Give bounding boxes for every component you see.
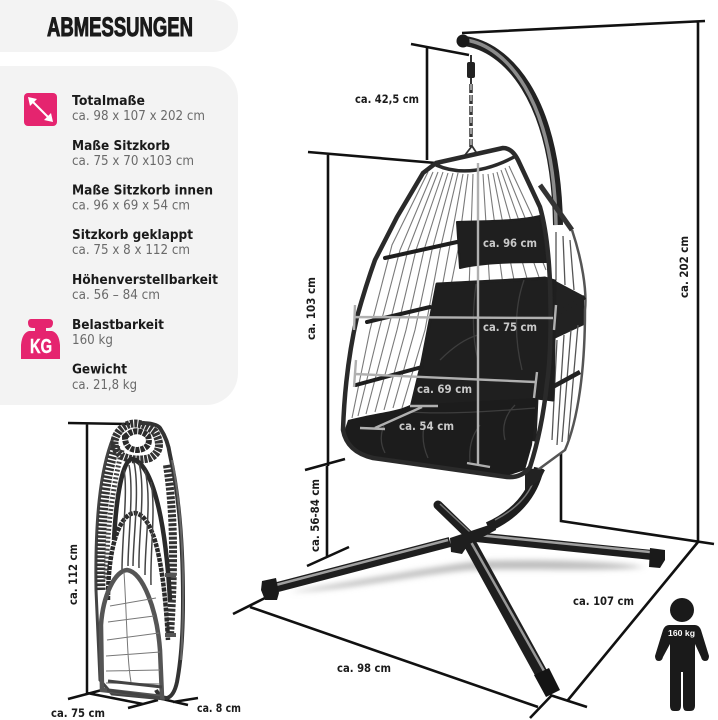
- panel: specifications: [0, 66, 238, 405]
- bottom bracket: [525, 468, 545, 490]
- spec: Gewicht: Gewicht: [72, 362, 127, 378]
- label: 98 cm: ca. 98 cm: [337, 661, 391, 675]
- spec: Sitzkorb geklappt: Sitzkorb geklappt: [72, 228, 193, 243]
- spec: Maße Sitzkorb: Maße Sitzkorb: [72, 139, 170, 154]
- spec: Totalmaße: [72, 94, 205, 124]
- post cap: [456, 34, 470, 48]
- spec: Höhenverstellbarkeit: [72, 273, 218, 303]
- label: 54 cm: ca. 54 cm: [399, 419, 454, 433]
- cushion seams: [381, 280, 535, 462]
- spec: Sitzkorb geklappt: ca. 75 x 8 x 112 cm: [72, 243, 190, 258]
- basket frame: [343, 148, 551, 477]
- seat cushion: [344, 280, 537, 476]
- label: 75 cm: ca. 75 cm: [483, 320, 537, 334]
- spec: Belastbarkeit: Belastbarkeit: [72, 318, 164, 333]
- spec: Maße Sitzkorb: ca. 75 x 70 x103 cm: [72, 154, 194, 169]
- title panel: [0, 0, 238, 52]
- spec: Gewicht: [72, 362, 137, 393]
- stand shadow: [290, 560, 645, 592]
- title: ABMESSUNGEN: [47, 12, 193, 42]
- rear basket side: [525, 185, 585, 490]
- basket spokes: [352, 166, 548, 418]
- back leg: [438, 504, 470, 536]
- spec: Höhenverstellbarkeit: Höhenverstellbarkeit: [72, 273, 218, 288]
- front leg: [468, 540, 560, 697]
- folded depth label: ca. 8 cm: [197, 701, 241, 715]
- spec: Maße Sitzkorb innen: [72, 184, 213, 214]
- post lower: [488, 468, 539, 527]
- chair stand: [261, 34, 665, 697]
- spec: Gewicht: ca. 21,8 kg: [72, 378, 137, 393]
- hub: [450, 523, 496, 554]
- post upper: [464, 41, 558, 225]
- spec: Totalmaße: ca. 98 x 107 x 202 cm: [72, 109, 205, 124]
- icon: weight KG: KG: [30, 336, 52, 358]
- interior measurement lines: [354, 163, 556, 467]
- label: 202 cm: ca. 202 cm: [677, 236, 691, 298]
- spec: Maße Sitzkorb innen: ca. 96 x 69 x 54 cm: [72, 198, 190, 214]
- icon: dimensions arrow: [24, 93, 57, 126]
- label: 107 cm: ca. 107 cm: [573, 594, 634, 608]
- label: 96 cm: ca. 96 cm: [483, 236, 537, 250]
- horizontal basket rails: [356, 242, 457, 385]
- folded basket dimension lines: [68, 423, 198, 708]
- label: 69 cm: ca. 69 cm: [417, 382, 472, 396]
- back cushion: [410, 278, 555, 440]
- spec: Belastbarkeit: 160 kg: [72, 333, 113, 348]
- headrest: [457, 216, 547, 268]
- icon: person 160 kg: [655, 598, 709, 711]
- right leg: [476, 535, 665, 568]
- spec: Maße Sitzkorb: [72, 139, 194, 169]
- label: 42,5 cm: ca. 42,5 cm: [355, 92, 419, 106]
- spec: Höhenverstellbarkeit: ca. 56 – 84 cm: [72, 288, 160, 303]
- spec: Totalmaße: Totalmaße: [72, 94, 145, 109]
- left leg: [261, 540, 450, 600]
- folded height label: ca. 112 cm: [66, 544, 80, 605]
- hanging chain: [465, 55, 478, 155]
- spec: Sitzkorb geklappt: [72, 228, 193, 258]
- spec: Belastbarkeit: [72, 318, 164, 348]
- folded width label: ca. 75 cm: [51, 706, 105, 720]
- label: 56-84 cm: ca. 56-84 cm: [308, 479, 322, 552]
- folded basket: [96, 423, 183, 699]
- dimension lines around chair: [233, 21, 714, 718]
- label: 103 cm: ca. 103 cm: [304, 277, 318, 340]
- spec: Maße Sitzkorb innen: Maße Sitzkorb innen: [72, 184, 213, 198]
- icon: weight KG: [21, 319, 60, 359]
- person load label: 160 kg: [668, 629, 695, 638]
